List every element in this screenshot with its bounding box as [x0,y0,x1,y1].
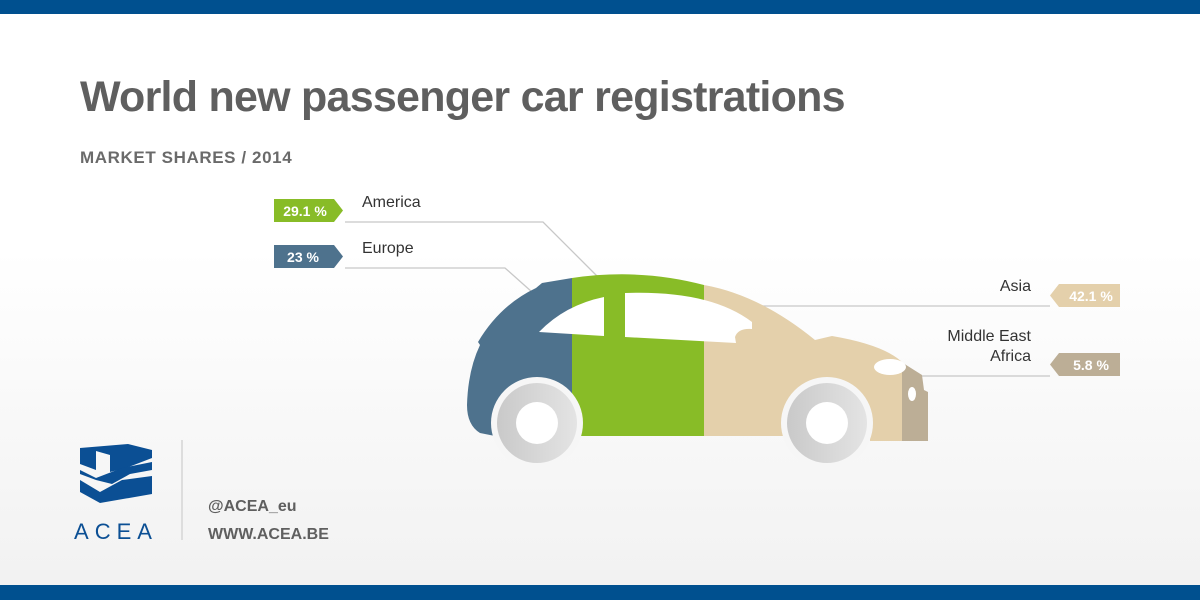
tag: Europe [274,240,414,268]
bottom bar [0,585,1200,600]
title: World new passenger car registrations [80,73,845,121]
windows [539,297,604,336]
tag: Middle East Africa: Middle East [947,328,1032,345]
tag: America: 29.1 % [283,203,327,219]
tag: Europe: Europe [362,240,414,257]
tag: Asia: Asia [1000,278,1031,295]
tag: Asia [1000,278,1120,307]
tag: Middle East Africa: Africa [990,348,1031,365]
icon: ACEA logo [74,444,158,544]
top bar [0,0,1200,14]
footer text [208,498,329,543]
car body [467,274,928,441]
tag: Asia: 42.1 % [1069,288,1113,304]
tag: America [274,194,421,222]
footer text: WWW.ACEA.BE [208,526,329,543]
wheels [491,377,583,469]
subtitle: MARKET SHARES / 2014 [80,148,292,167]
icon: ACEA logo: ACEA [74,519,158,544]
tag: America: America [362,194,421,211]
tag: Middle East Africa [947,328,1120,376]
tag: Europe: 23 % [287,249,320,265]
chart: car [74,196,1120,540]
tag: Middle East Africa: 5.8 % [1073,357,1109,373]
footer text: @ACEA_eu [208,498,297,515]
leader lines [345,222,1050,376]
